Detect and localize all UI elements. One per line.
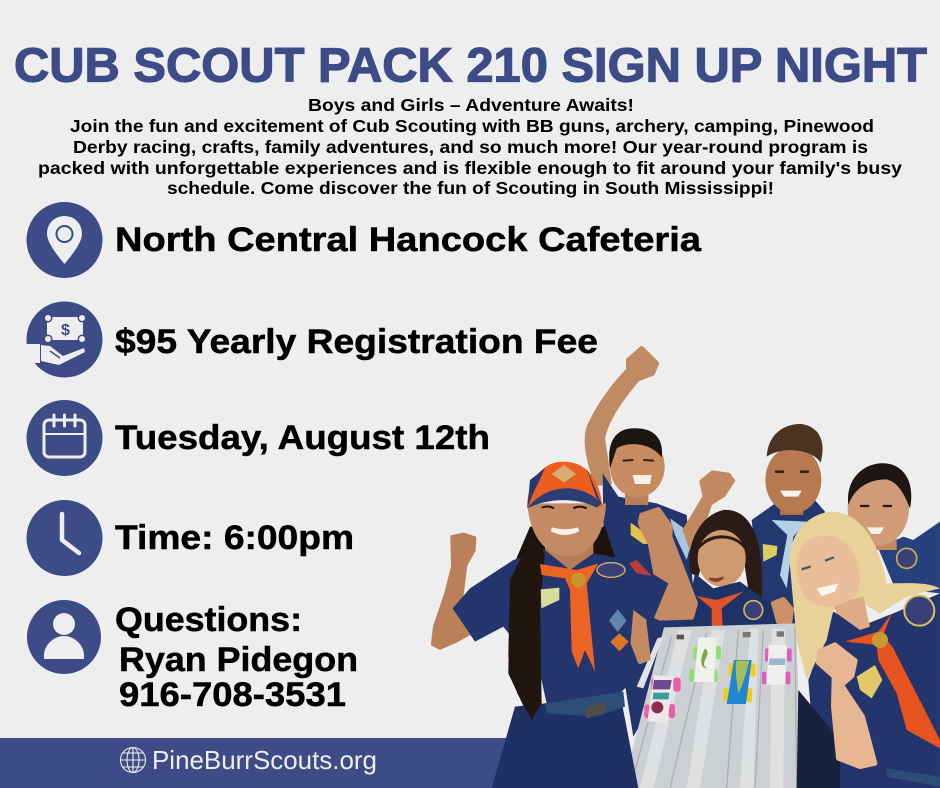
tall boy with curly hair	[685, 424, 825, 633]
neckerchief	[845, 613, 940, 748]
cap	[527, 462, 602, 508]
raised arm	[433, 535, 474, 647]
questions text: Questions:	[115, 601, 302, 639]
photo: cub scouts with pinewood derby track	[433, 348, 940, 788]
shirt	[808, 593, 940, 788]
neckerchief	[540, 563, 598, 672]
long hair behind	[508, 527, 615, 720]
girl in orange cap	[433, 462, 696, 788]
shirt	[453, 550, 668, 703]
face	[797, 536, 860, 607]
intro text block: schedule. Come discover the fun of Scouting in South Mississippi!	[167, 178, 774, 198]
intro text block: Derby racing, crafts, family adventures, and so much more! Our year-round program is	[73, 137, 868, 157]
questions text: 916-708-3531	[119, 676, 346, 714]
neck	[545, 543, 593, 572]
icon: money in hand: $	[61, 322, 70, 339]
location text: North Central Hancock Cafeteria	[115, 221, 702, 259]
car: green and white	[689, 637, 721, 682]
patches	[857, 596, 934, 698]
date text: Tuesday, August 12th	[115, 419, 490, 457]
icon: money in hand	[25, 302, 102, 378]
icon: person	[27, 600, 101, 674]
long hair front	[508, 537, 545, 720]
boy on right	[848, 463, 940, 593]
pinewood derby track	[623, 623, 802, 788]
questions text	[115, 601, 358, 714]
icon: globe	[120, 748, 146, 772]
skirt	[492, 693, 638, 788]
face	[527, 503, 606, 556]
intro text block: Boys and Girls – Adventure Awaits!	[308, 95, 634, 115]
bent arm	[640, 509, 696, 618]
car: pink and silver	[762, 645, 792, 685]
intro text block	[38, 95, 902, 198]
car: blue	[723, 660, 756, 704]
blonde hair	[790, 512, 940, 680]
intro text block: Join the fun and excitement of Cub Scouting with BB guns, archery, camping, Pinewood	[70, 116, 874, 136]
icon: location pin	[26, 202, 102, 278]
fee text: $95 Yearly Registration Fee	[115, 323, 598, 361]
girl with braids	[683, 510, 792, 627]
car: purple and white	[644, 675, 681, 722]
patches	[541, 560, 652, 651]
boy with raised fist	[587, 348, 697, 737]
icon: calendar	[26, 400, 102, 476]
arm and fist	[818, 645, 875, 767]
title: CUB SCOUT PACK 210 SIGN UP NIGHT	[14, 40, 927, 92]
icon: clock	[26, 500, 102, 576]
neck	[833, 597, 870, 630]
questions text: Ryan Pidegon	[119, 641, 358, 679]
website text: PineBurrScouts.org	[152, 745, 377, 775]
footer band	[0, 738, 520, 788]
blonde girl	[790, 512, 940, 788]
intro text block: packed with unforgettable experiences and is flexible enough to fit around your family's busy	[38, 158, 902, 178]
time text: Time: 6:00pm	[115, 519, 354, 557]
